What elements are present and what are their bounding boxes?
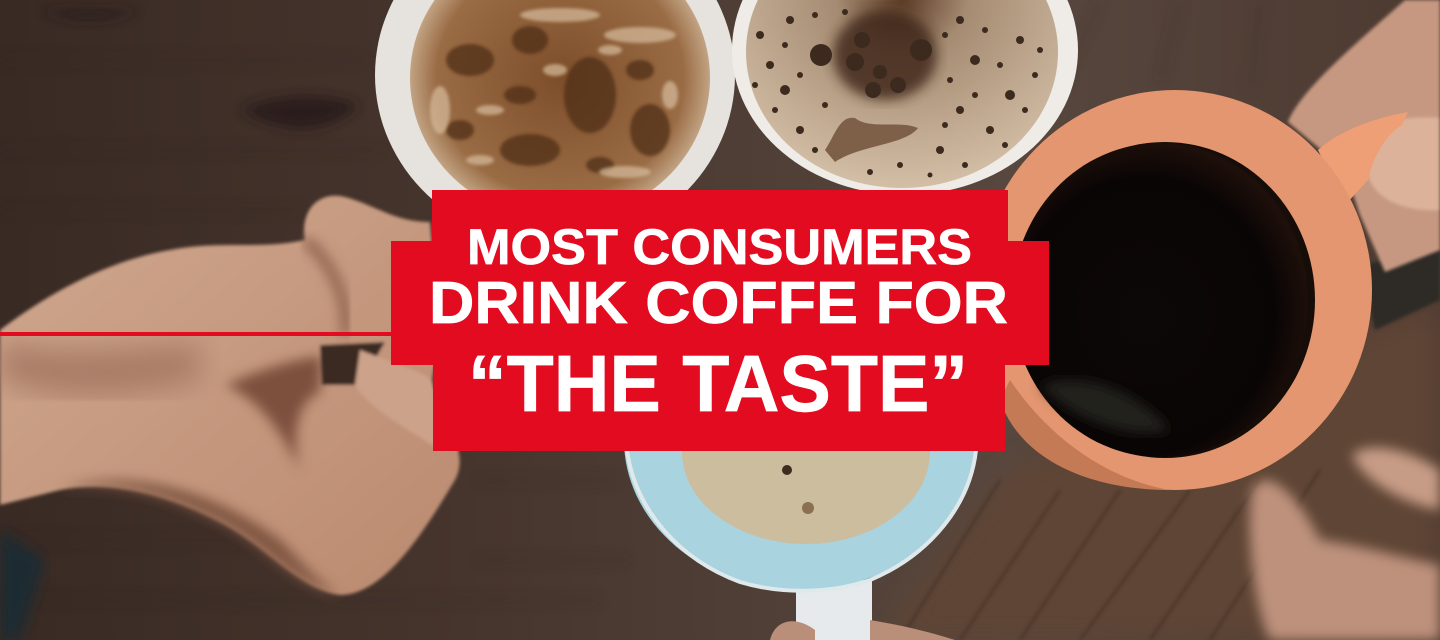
cup: blue mug with cream coffee (624, 290, 976, 640)
cup: bubbly coffee (732, 0, 1078, 195)
title line 3: “THE TASTE” (468, 339, 968, 428)
right hand top (1288, 0, 1440, 272)
cup: orange mug with black coffee (978, 90, 1408, 490)
right hand bottom (1250, 448, 1440, 640)
red line (0, 332, 395, 336)
title line 1: MOST CONSUMERS (467, 219, 972, 275)
red stepped block (391, 190, 1049, 451)
cup: latte with cinnamon (375, 0, 735, 245)
title line 2: DRINK COFFE FOR (429, 270, 1008, 336)
title banner (391, 190, 1049, 451)
left hand holding cup (0, 196, 460, 595)
